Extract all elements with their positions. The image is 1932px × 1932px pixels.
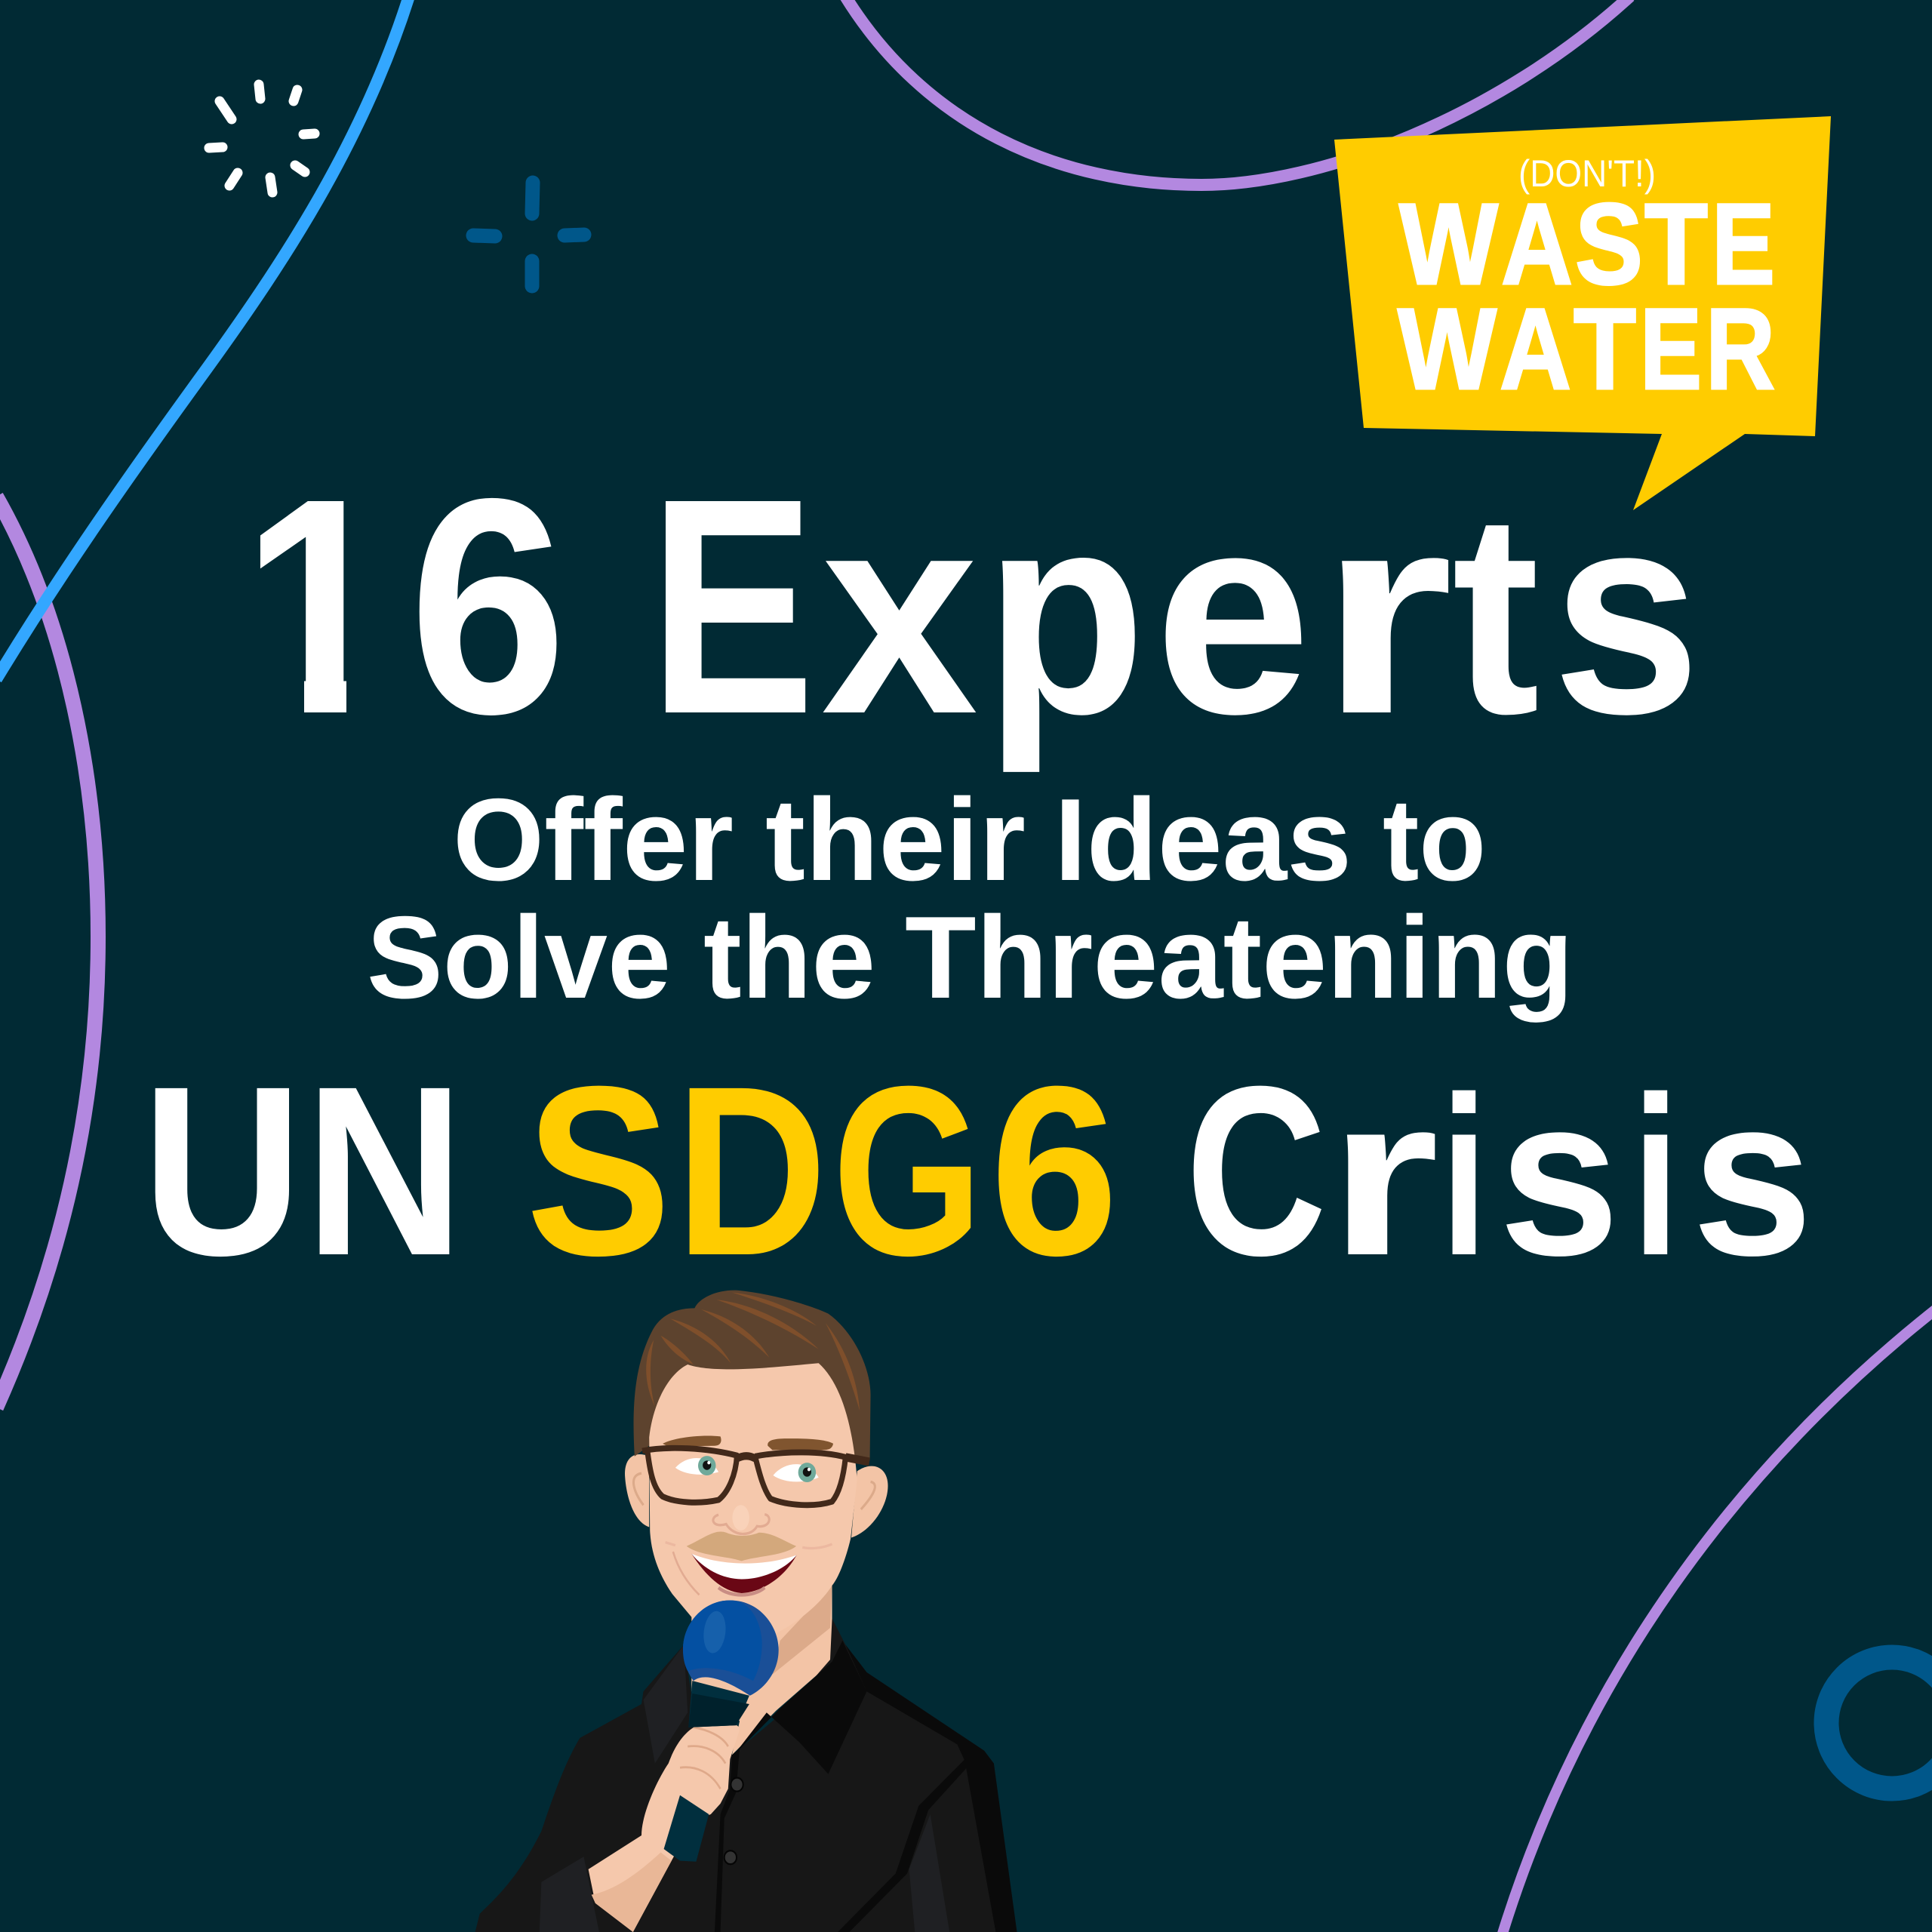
subheading line: Solve the Threatening: the	[703, 892, 875, 1023]
headline: UN SDG6 Crisis: i	[1441, 1049, 1487, 1303]
bubble text: (DON'T!): (DON'T!)	[1518, 152, 1656, 195]
shirt	[475, 1619, 1017, 1932]
cheek lines	[673, 1552, 700, 1595]
headline: UN SDG6 Crisis: U	[142, 1035, 303, 1306]
mouth	[691, 1554, 797, 1593]
headline: UN SDG6 Crisis: S	[526, 1035, 671, 1306]
headline: UN SDG6 Crisis: s	[1692, 1049, 1813, 1303]
bubble text: WASTE: W	[1399, 180, 1499, 309]
nose	[732, 1505, 749, 1531]
moustache	[687, 1531, 796, 1561]
eyebrows	[663, 1435, 721, 1447]
headline: 16 Experts: s	[1552, 453, 1700, 774]
eyes	[675, 1458, 718, 1475]
speech bubble: (Don't!) Waste Water	[1334, 116, 1831, 510]
subheading line: Offer their Ideas to: their	[765, 774, 1026, 905]
bubble text: WASTE	[1399, 180, 1775, 309]
headline: 16 Experts: t	[1452, 453, 1540, 774]
subheading line: Solve the Threatening	[367, 892, 1574, 1023]
hair highlights	[646, 1293, 860, 1411]
headline: UN SDG6 Crisis: i	[1632, 1049, 1679, 1303]
icon: dark blue ring	[1826, 1657, 1932, 1789]
ears	[625, 1454, 649, 1527]
headline: UN SDG6 Crisis: s	[1499, 1049, 1620, 1303]
microphone handle	[664, 1681, 749, 1862]
headline: 16 Experts: e	[1155, 453, 1311, 774]
headline: UN SDG6 Crisis: D	[675, 1035, 827, 1306]
subheading line: Offer their Ideas to: Ideas	[1054, 774, 1352, 905]
headline: 16 Experts: r	[1319, 453, 1454, 774]
subheading line: Solve the Threatening: Threatening	[905, 892, 1574, 1023]
microphone head	[683, 1601, 779, 1696]
subheading line: Solve the Threatening: Solve	[367, 892, 671, 1023]
icon: white sparkle	[209, 85, 315, 192]
hair	[634, 1291, 871, 1460]
headline: 16 Experts: 1	[242, 435, 395, 778]
bubble text: WATER: W	[1398, 285, 1497, 414]
forearm and hand	[589, 1721, 740, 1932]
curve: top purple arc	[845, 0, 1630, 185]
finger lines	[680, 1727, 728, 1789]
shirt shading	[715, 1641, 1017, 1932]
headline: 16 Experts	[260, 498, 1690, 772]
bubble text: WATER	[1398, 285, 1775, 414]
subheading line: Offer their Ideas to	[453, 774, 1486, 905]
headline: UN SDG6 Crisis: 6	[990, 1035, 1118, 1306]
headline: UN SDG6 Crisis: N	[305, 1035, 464, 1306]
curve: bottom right purple arc	[1502, 1309, 1932, 1932]
headline: 16 Experts: E	[649, 435, 815, 778]
bubble text: WASTE: E	[1712, 180, 1775, 309]
subheading line: Offer their Ideas to: Offer	[453, 774, 734, 905]
bubble text: WATER: A	[1500, 285, 1571, 414]
headline: UN SDG6 Crisis: r	[1328, 1049, 1439, 1303]
bubble shape	[1334, 116, 1831, 510]
glasses	[642, 1448, 869, 1505]
bubble text: WASTE: A	[1501, 180, 1573, 309]
headline: UN SDG6 Crisis: C	[1186, 1035, 1327, 1306]
bubble text: WATER: R	[1706, 285, 1775, 414]
bubble text: WASTE: T	[1644, 180, 1708, 309]
bubble text: WATER: T	[1574, 285, 1636, 414]
headline: 16 Experts: x	[821, 453, 980, 774]
subheading line: Offer their Ideas to: to	[1383, 774, 1486, 905]
headline: 16 Experts: 6	[409, 435, 567, 778]
headline: 16 Experts: p	[985, 453, 1146, 775]
headline: UN SDG6 Crisis	[142, 1035, 1813, 1306]
illustration: presenter with microphone	[475, 1291, 1017, 1932]
curve: blue line	[0, 0, 409, 679]
icon: blue plus sparkle	[473, 183, 584, 286]
bubble text: WATER: E	[1640, 285, 1702, 414]
bubble text: WASTE: S	[1575, 180, 1643, 309]
headline: UN SDG6 Crisis: G	[832, 1035, 983, 1306]
curve: left purple arc	[0, 497, 98, 1407]
neck	[691, 1581, 832, 1755]
shirt buttons	[731, 1778, 743, 1792]
face	[649, 1363, 857, 1641]
